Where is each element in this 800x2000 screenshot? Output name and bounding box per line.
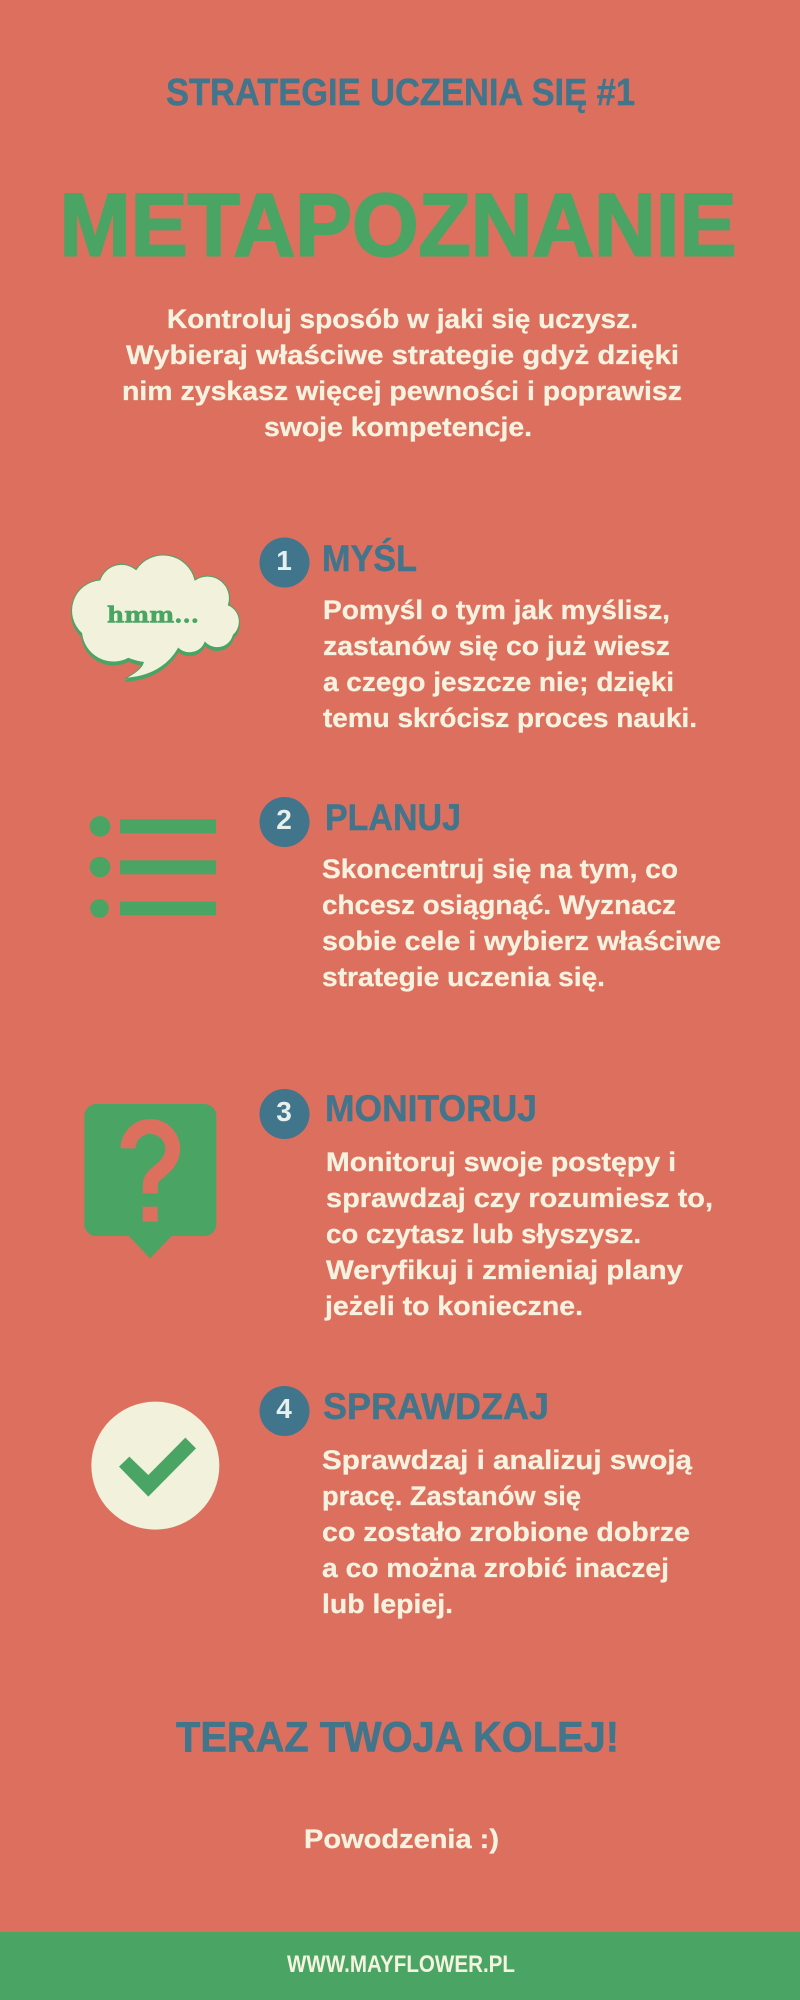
text block: step 2: chcesz osiągnąć. Wyznacz [322,890,676,920]
number badge 4 [260,1386,310,1436]
text block: step 3: Weryfikuj i zmieniaj plany [326,1255,683,1285]
website address: WWW.MAYFLOWER.PL [287,1951,515,1978]
text block: step 4: pracę. Zastanów się [322,1481,581,1511]
panel: step 2 plan [90,797,721,992]
text block: step 2 [322,854,721,992]
heading: monitoruj: MONITORUJ [325,1088,537,1129]
text block: step 2: sobie cele i wybierz właściwe [322,926,721,956]
heading: planuj: PLANUJ [325,797,461,838]
text block: step 2: Skoncentruj się na tym, co [322,854,678,884]
number badge 1: 1 [276,545,292,576]
text block: step 4: a co można zrobić inaczej [322,1553,669,1583]
text block: step 1: a czego jeszcze nie; dzięki [323,667,674,697]
number badge 2 [260,797,310,847]
number badge 1 [260,538,310,588]
icon: check mark circle [91,1402,219,1530]
intro text: Kontroluj sposób w jaki się uczysz. [167,304,638,334]
heading: myśl: MYŚL [322,537,417,579]
intro text: Wybieraj właściwe strategie gdyż dzięki [126,340,679,370]
text block: step 4 [322,1445,693,1619]
panel: step 1 think [72,537,697,733]
panel: step 4 check [91,1386,693,1619]
intro text: swoje kompetencje. [264,412,532,442]
text block: step 3: jeżeli to konieczne. [324,1291,583,1321]
main title: METAPOZNANIE [60,174,736,274]
text block: step 1: zastanów się co już wiesz [323,631,670,661]
series heading: STRATEGIE UCZENIA SIĘ #1 [166,72,635,114]
call to action heading: TERAZ TWOJA KOLEJ! [176,1714,619,1762]
text block: step 4: lub lepiej. [322,1589,453,1619]
panel: step 3 monitor [84,1088,713,1321]
text block: step 1 [323,595,697,733]
text block: step 1: temu skrócisz proces nauki. [323,703,697,733]
icon: thought cloud: hmm... [107,603,199,629]
intro text [122,304,682,442]
number badge 4: 4 [276,1393,292,1424]
text block: step 4: co zostało zrobione dobrze [322,1517,690,1547]
text block: step 3: co czytasz lub słyszysz. [326,1219,641,1249]
footer band [0,1932,800,2000]
icon: thought cloud [72,555,239,681]
text block: step 1: Pomyśl o tym jak myślisz, [323,595,670,625]
text block: step 3 [324,1147,713,1321]
number badge 2: 2 [276,804,292,835]
intro text: nim zyskasz więcej pewności i poprawisz [122,376,682,406]
icon: checklist lines [90,816,216,918]
icon: question speech bubble [84,1104,216,1258]
text block: step 4: Sprawdzaj i analizuj swoją [322,1445,693,1475]
text block: step 2: strategie uczenia się. [322,962,605,992]
closing message: Powodzenia :) [304,1824,499,1854]
number badge 3 [260,1089,310,1139]
heading: sprawdzaj: SPRAWDZAJ [323,1386,549,1427]
number badge 3: 3 [276,1096,292,1127]
text block: step 3: sprawdzaj czy rozumiesz to, [326,1183,713,1213]
text block: step 3: Monitoruj swoje postępy i [326,1147,676,1177]
